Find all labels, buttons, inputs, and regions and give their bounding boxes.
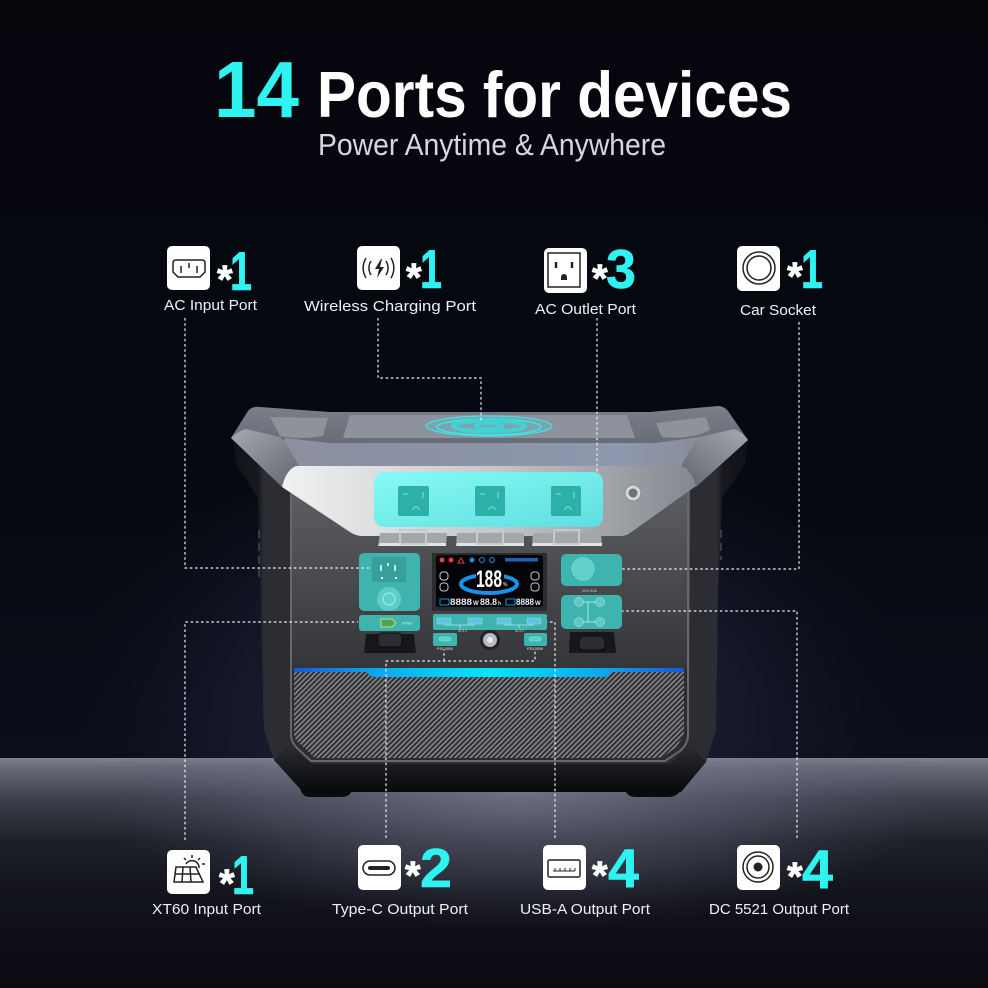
count: 1 — [420, 238, 442, 300]
top handle right — [656, 417, 710, 438]
count: * — [787, 255, 803, 299]
count: * — [592, 854, 608, 898]
fan vent icon — [625, 485, 641, 501]
count — [406, 238, 442, 300]
power button — [480, 630, 500, 650]
leader: DC output — [622, 611, 797, 838]
DC output highlight panel — [561, 595, 622, 629]
icon: car socket — [737, 246, 780, 291]
leader: Type-C output — [386, 650, 535, 838]
count — [405, 837, 452, 899]
label: AC Input Port — [164, 297, 258, 314]
top handle left — [270, 417, 328, 438]
count — [592, 837, 639, 899]
label: Car Socket — [740, 302, 817, 319]
callout: wireless charging — [304, 238, 477, 315]
icon: solar panel — [167, 850, 210, 894]
XT60 connector — [381, 619, 396, 627]
count: * — [592, 257, 608, 301]
count: 2 — [420, 837, 452, 899]
title text: Ports for devices — [317, 58, 792, 131]
outlet latches — [378, 530, 602, 546]
count — [787, 838, 833, 900]
LCD readouts: 8888 — [450, 597, 472, 608]
count: 4 — [802, 838, 833, 900]
icon: wireless — [357, 246, 400, 290]
power station device — [231, 406, 748, 797]
USB-A highlight panel — [433, 614, 547, 630]
count — [787, 238, 823, 300]
AC input breaker — [377, 587, 401, 611]
floor — [0, 758, 988, 988]
subtitle: Power Anytime & Anywhere — [318, 127, 666, 162]
XT60 highlight panel — [359, 615, 420, 631]
icon: DC 5521 — [737, 845, 780, 890]
AC input highlight panel — [359, 553, 420, 611]
LCD battery percent: % — [503, 582, 508, 588]
outlet 2 — [475, 486, 505, 516]
leader: AC outlet — [596, 318, 598, 472]
LCD display — [432, 553, 547, 611]
Type-C port left — [433, 633, 457, 646]
callout: Type-C output — [332, 837, 469, 918]
LCD status icons — [440, 558, 538, 563]
device body — [233, 440, 748, 792]
leader: car socket — [622, 322, 799, 569]
background glow — [0, 300, 988, 758]
count: * — [787, 855, 803, 899]
label: AC Outlet Port — [535, 301, 637, 318]
LCD charge ring — [461, 575, 517, 593]
device feet — [300, 788, 682, 797]
carbon panel — [294, 672, 684, 758]
count: 1 — [230, 240, 252, 302]
LCD battery percent: 188 — [476, 566, 502, 593]
light top plate — [282, 466, 696, 536]
DC ports — [574, 598, 604, 626]
label: DC 5521 Output Port — [709, 901, 850, 918]
USB-A ports — [437, 618, 541, 624]
left lower port — [364, 633, 416, 653]
title — [214, 45, 792, 134]
right lower port — [569, 632, 616, 653]
leader: XT60 input — [185, 622, 358, 840]
LCD readouts: 8888 — [516, 597, 534, 608]
label: Type-C Output Port — [332, 901, 469, 918]
icon: USB-A — [543, 845, 586, 890]
icon: Type-C — [358, 845, 401, 890]
leader: USB-A output — [547, 622, 555, 838]
count: * — [405, 854, 421, 898]
left wing — [231, 429, 300, 487]
callout: XT60 input — [152, 844, 262, 918]
Type-C port right — [524, 633, 547, 646]
count — [217, 240, 252, 302]
wireless charging highlight — [426, 416, 552, 436]
LCD readouts: W — [535, 601, 541, 607]
right wing — [680, 429, 748, 487]
count: * — [219, 862, 235, 906]
leader: wireless charging — [378, 318, 481, 422]
LCD side badges — [440, 572, 539, 591]
label: XT60 Input Port — [152, 901, 262, 918]
outlet 1 — [398, 486, 429, 516]
title number: 14 — [214, 45, 299, 134]
icon: outlet — [544, 248, 587, 293]
PD labels: QC3.0 — [515, 628, 524, 632]
count: * — [217, 258, 233, 302]
PD labels: PD100W — [437, 646, 453, 651]
label: Wireless Charging Port — [304, 298, 477, 315]
leader: AC input — [185, 318, 370, 568]
outlet 3 — [551, 486, 581, 516]
LCD readouts: h — [498, 601, 501, 607]
side vents — [259, 530, 721, 580]
panel trim — [291, 494, 688, 761]
AC outlet highlight panel — [374, 472, 603, 527]
LCD readouts: 88.8 — [480, 597, 497, 608]
count — [592, 238, 636, 301]
count: 4 — [608, 837, 639, 899]
blue light strip — [294, 668, 684, 677]
car socket rating: 12V=10A — [582, 589, 597, 593]
callout: DC output — [709, 838, 850, 918]
icon: AC input — [167, 246, 210, 290]
LCD readouts: W — [473, 601, 479, 607]
front panel — [290, 470, 690, 670]
count: 1 — [801, 238, 823, 300]
AC input socket — [372, 557, 406, 582]
top pad — [343, 415, 635, 438]
car socket highlight panel — [561, 554, 622, 586]
PD labels — [437, 628, 543, 651]
label: USB-A Output Port — [520, 901, 651, 918]
count: * — [406, 256, 422, 300]
count — [219, 844, 254, 906]
callout: USB-A output — [520, 837, 651, 918]
LCD readouts — [440, 597, 541, 608]
callout: AC outlet — [535, 238, 637, 318]
callout: AC input — [164, 240, 258, 314]
XT60 text: XT60 — [402, 620, 412, 626]
PD labels: QC3.0 — [458, 628, 467, 632]
device base — [274, 745, 706, 792]
count: 1 — [232, 844, 254, 906]
PD labels: PD100W — [527, 646, 543, 651]
callout: car socket — [737, 238, 823, 319]
car socket knob — [571, 557, 595, 581]
top shell — [231, 406, 748, 470]
top band — [270, 437, 712, 470]
count: 3 — [606, 238, 636, 300]
